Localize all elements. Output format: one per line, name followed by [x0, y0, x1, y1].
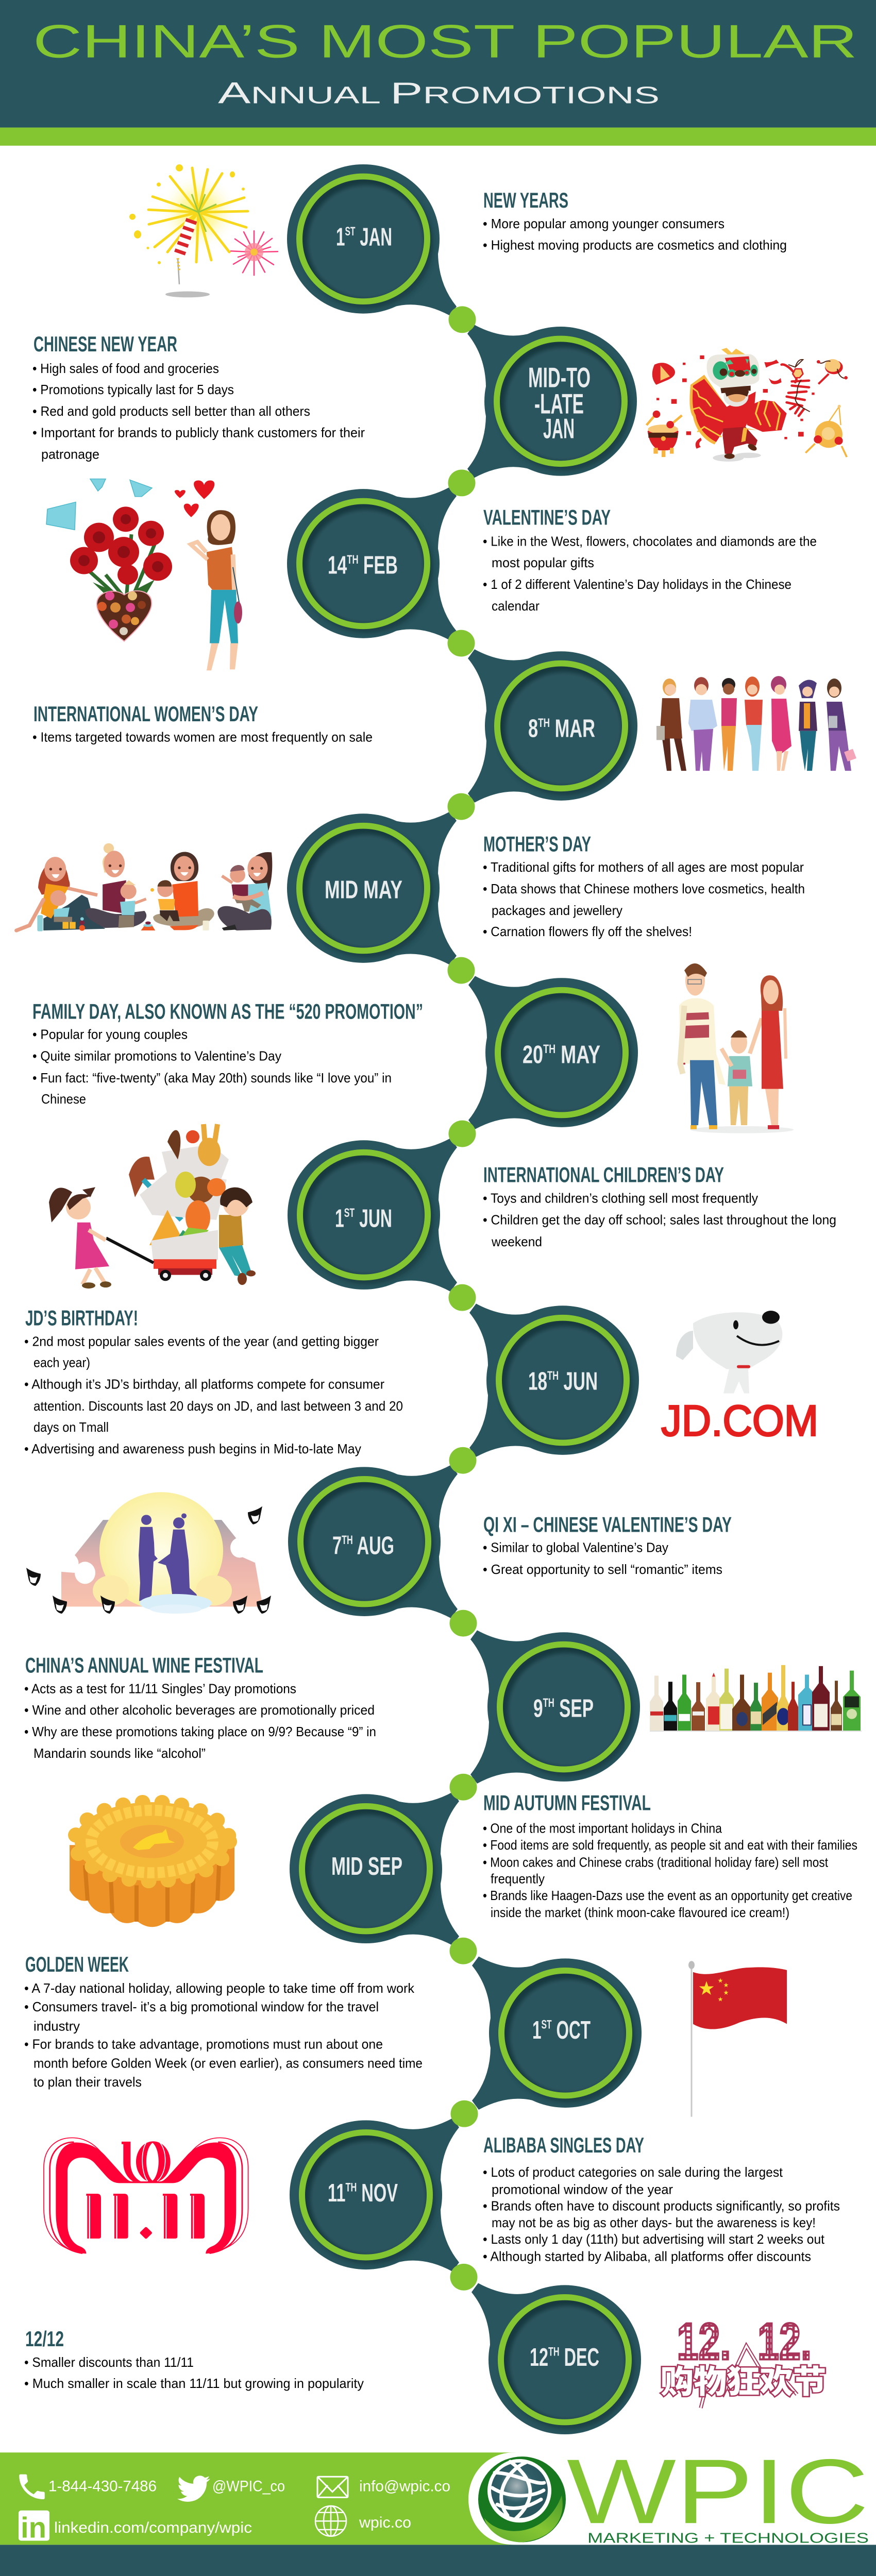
icon: mothers and children	[16, 843, 272, 931]
node: 12th Dec	[488, 2285, 641, 2434]
node: 18th Jun: TH	[547, 1369, 559, 1383]
panel: Valentine's Day	[483, 505, 817, 614]
node: 11th Nov	[290, 2120, 442, 2269]
node: 12th Dec: DEC	[560, 2343, 599, 2371]
bullets: • Important for brands to publicly thank customers for their	[32, 426, 365, 440]
bullets: • Carnation flowers fly off the shelves!	[483, 925, 692, 939]
bullets: weekend	[491, 1235, 542, 1249]
contact: email: info@wpic.co	[359, 2478, 450, 2495]
node: 7th Aug	[288, 1467, 441, 1616]
node: 9th Sep	[487, 1632, 640, 1782]
panel: Family Day	[32, 999, 423, 1107]
node: 12th Dec: TH	[548, 2345, 560, 2359]
icon: globe	[315, 2506, 346, 2536]
icon: mooncake	[70, 1802, 234, 1927]
bullets: • Lots of product categories on sale during the largest	[483, 2165, 783, 2180]
node: 7th Aug: AUG	[353, 1532, 394, 1560]
contact: phone number: 1-844-430-7486	[48, 2478, 157, 2495]
node: 7th Aug: 7	[332, 1532, 347, 1560]
logo: 12.12 shopping carnival: 购物狂欢节	[661, 2364, 826, 2400]
bullets: • Although it’s JD’s birthday, all platforms compete for consumer	[24, 1378, 384, 1392]
logo: WPIC: MARKETING + TECHNOLOGIES	[587, 2530, 869, 2546]
bullets: calendar	[492, 599, 540, 614]
panel: Golden Week	[24, 1952, 423, 2090]
bullets	[24, 1335, 403, 1456]
bullets: • 1 of 2 different Valentine’s Day holidays in the Chinese	[483, 578, 791, 592]
bullets	[24, 2355, 364, 2391]
bullets: • Toys and children’s clothing sell most frequently	[483, 1192, 758, 1206]
bullets: • Highest moving products are cosmetics and clothing	[483, 239, 787, 252]
node: 8th Mar	[485, 651, 637, 801]
bullets: • Traditional gifts for mothers of all ages are most popular	[483, 860, 804, 875]
bullets: promotional window of the year	[492, 2183, 673, 2197]
panel: Alibaba Singles Day	[483, 2133, 840, 2264]
footer	[0, 2441, 876, 2576]
node: 20th May: TH	[543, 1042, 555, 1056]
panel: Mid Autumn Festival	[483, 1791, 857, 1920]
bullets: • Popular for young couples	[32, 1028, 188, 1042]
node: Mid-to-late Jan	[484, 327, 637, 476]
bullets: most popular gifts	[492, 556, 594, 570]
panel: JD's Birthday	[24, 1306, 403, 1456]
bullets: may not be as big as other days- but the awareness is key!	[492, 2216, 816, 2230]
heading: FAMILY DAY, ALSO KNOWN AS THE “520 PROMOTION”	[32, 999, 423, 1024]
bullets	[24, 1981, 423, 2090]
panel: 12/12	[24, 2327, 364, 2391]
node: 11th Nov: 11	[328, 2179, 355, 2207]
bullets: • Quite similar promotions to Valentine’s Day	[32, 1049, 281, 1064]
node: 1st Oct: OCT	[552, 2016, 591, 2044]
icon: kids and toy cart	[49, 1124, 256, 1289]
logo: WPIC	[478, 2441, 869, 2546]
icon: Qi Xi moon and lovers	[26, 1492, 271, 1614]
panel: Qi Xi	[483, 1513, 732, 1577]
icon: group of women	[656, 676, 856, 771]
contact: linkedin: linkedin.com/company/wpic	[54, 2519, 252, 2536]
bullets: inside the market (think moon-cake flavoured ice cream!)	[491, 1906, 789, 1920]
node: 20th May	[485, 978, 638, 1127]
bullets: month before Golden Week (or even earlier), as consumers need time	[33, 2057, 423, 2071]
node: 14th Feb: 14	[328, 551, 357, 579]
icon: phone	[19, 2475, 45, 2499]
node: 9th Sep: TH	[543, 1696, 554, 1710]
bullets	[32, 362, 365, 462]
heading: ALIBABA SINGLES DAY	[483, 2133, 644, 2158]
node: Mid May: MID MAY	[325, 876, 402, 904]
panel: Chinese New Year	[32, 332, 365, 462]
panel: International Women's Day	[32, 702, 373, 744]
node: 8th Mar: TH	[538, 716, 550, 730]
bullets: • For brands to take advantage, promotions must run about one	[24, 2038, 383, 2052]
icon: family	[679, 963, 794, 1133]
bullets: • One of the most important holidays in China	[483, 1822, 722, 1836]
heading: MOTHER’S DAY	[483, 832, 591, 857]
node: 1st Jan: 1	[336, 223, 350, 251]
node: Mid Sep: MID SEP	[331, 1852, 402, 1880]
bullets	[483, 2165, 840, 2264]
bullets: • Although started by Alibaba, all platforms offer discounts	[483, 2250, 811, 2264]
bullets: to plan their travels	[33, 2075, 142, 2090]
icon: valentine roses, chocolates and woman	[46, 479, 242, 670]
bullets	[483, 1192, 836, 1249]
bullets: • Similar to global Valentine’s Day	[483, 1541, 668, 1555]
panel: New Years	[483, 189, 787, 252]
logo: 12.12 shopping carnival: 12.	[757, 2312, 812, 2370]
node: 18th Jun: JUN	[559, 1367, 598, 1396]
icon: China flag	[688, 1961, 787, 2117]
bullets: • Fun fact: “five-twenty” (aka May 20th) sounds like “I love you” in	[32, 1071, 392, 1086]
contact: website: wpic.co	[359, 2514, 411, 2531]
bullets: • Promotions typically last for 5 days	[32, 383, 234, 397]
node: Mid May	[287, 814, 440, 963]
bullets: • Wine and other alcoholic beverages are promotionally priced	[24, 1703, 375, 1718]
bullets: • Consumers travel- it’s a big promotional window for the travel	[24, 2000, 379, 2014]
bullets: packages and jewellery	[492, 904, 622, 918]
bullets	[483, 535, 817, 614]
bullets: • Children get the day off school; sales last throughout the long	[483, 1213, 836, 1228]
bullets: • 2nd most popular sales events of the year (and getting bigger	[24, 1335, 379, 1349]
icon: fireworks	[129, 164, 278, 297]
node: 1st Oct	[489, 1958, 642, 2108]
bullets: • Great opportunity to sell “romantic” items	[483, 1563, 722, 1577]
icon: liquor bottles	[650, 1665, 862, 1732]
bullets: Chinese	[41, 1092, 86, 1107]
header banner	[0, 0, 876, 146]
bullets: frequently	[491, 1872, 545, 1887]
heading: QI XI – CHINESE VALENTINE’S DAY	[483, 1513, 732, 1537]
node: 11th Nov: NOV	[357, 2179, 398, 2207]
bullets: • Like in the West, flowers, chocolates and diamonds are the	[483, 535, 817, 549]
bullets: attention. Discounts last 20 days on JD, and last between 3 and 20	[33, 1399, 403, 1414]
icon: linkedin: in	[21, 2512, 46, 2544]
node: 18th Jun	[486, 1306, 639, 1455]
title: CHINA’S MOST POPULAR	[33, 15, 857, 67]
logo: WPIC: WPIC	[567, 2441, 869, 2543]
panel: China's Annual Wine Festival	[24, 1653, 376, 1761]
logo: 12.12 shopping carnival	[661, 2312, 826, 2408]
bullets: • Advertising and awareness push begins in Mid-to-late May	[24, 1442, 361, 1456]
bullets: • Brands often have to discount products significantly, so profits	[483, 2199, 840, 2214]
logo: JD.com	[661, 1311, 818, 1445]
bullets: • More popular among younger consumers	[483, 217, 725, 231]
bullets: • Why are these promotions taking place on 9/9? Because “9” in	[24, 1725, 376, 1739]
bullets: • Much smaller in scale than 11/11 but growing in popularity	[24, 2377, 364, 2391]
bullets	[483, 860, 805, 939]
node: Mid-to-late Jan: MID-TO	[528, 362, 591, 393]
subtitle: A NNUAL P ROMOTIONS	[218, 76, 660, 110]
logo: 11.11	[44, 2138, 248, 2253]
panel: Mother's Day	[483, 832, 805, 939]
bullets	[483, 1822, 857, 1920]
node: 1st Jun	[288, 1140, 440, 1290]
heading: 12/12	[25, 2327, 64, 2351]
node: 1st Jan	[287, 164, 440, 314]
timeline	[287, 164, 642, 2434]
node: 1st Oct: 1	[532, 2016, 547, 2044]
node: 20th May: 20	[523, 1041, 551, 1069]
heading: GOLDEN WEEK	[25, 1952, 129, 1977]
icon: lion dance	[647, 348, 848, 462]
bullets	[483, 217, 787, 252]
node: 18th Jun: 18	[528, 1367, 557, 1396]
bullets: • Lasts only 1 day (11th) but advertising will start 2 weeks out	[483, 2232, 824, 2247]
bullets	[24, 1682, 376, 1761]
contact: twitter: @WPIC_co	[212, 2478, 285, 2495]
node: Mid Sep	[290, 1794, 442, 1943]
bullets: industry	[33, 2020, 80, 2033]
node: 9th Sep: 9	[533, 1694, 548, 1723]
node: Mid-to-late Jan: JAN	[543, 413, 575, 444]
node: 14th Feb: FEB	[359, 551, 398, 579]
node: Mid-to-late Jan: -LATE	[534, 388, 584, 419]
bullets: • Data shows that Chinese mothers love cosmetics, health	[483, 882, 805, 896]
node: 11th Nov: TH	[345, 2181, 357, 2194]
logo: JD.com: JD.COM	[661, 1397, 818, 1445]
heading: JD’S BIRTHDAY!	[25, 1306, 138, 1330]
node: 8th Mar: MAR	[550, 715, 595, 742]
heading: MID AUTUMN FESTIVAL	[483, 1791, 651, 1816]
heading: VALENTINE’S DAY	[483, 505, 611, 530]
panel: International Children's Day	[483, 1163, 836, 1249]
bullets: • Red and gold products sell better than all others	[32, 404, 310, 419]
bullets: • A 7-day national holiday, allowing people to take time off from work	[24, 1981, 414, 1996]
bullets: days on Tmall	[33, 1420, 109, 1435]
bullets: • Acts as a test for 11/11 Singles’ Day promotions	[24, 1682, 296, 1697]
node: 1st Oct: ST	[542, 2018, 552, 2031]
bullets: • Items targeted towards women are most frequently on sale	[32, 731, 373, 744]
node: 1st Jun: 1	[335, 1205, 349, 1232]
bullets	[483, 1541, 722, 1577]
icon: envelope	[317, 2477, 348, 2497]
bullets: • Moon cakes and Chinese crabs (traditional holiday fare) sell most	[483, 1856, 828, 1870]
node: 9th Sep: SEP	[554, 1694, 594, 1723]
heading: CHINA’S ANNUAL WINE FESTIVAL	[25, 1653, 263, 1677]
node: 1st Jun: JUN	[355, 1205, 392, 1232]
node: 20th May: MAY	[555, 1041, 600, 1069]
bullets: • Smaller discounts than 11/11	[24, 2355, 194, 2370]
node: 1st Jan: JAN	[356, 223, 392, 251]
heading: INTERNATIONAL WOMEN’S DAY	[33, 702, 258, 726]
node: 1st Jan: ST	[345, 225, 356, 239]
node: 14th Feb: TH	[347, 553, 359, 567]
bullets: patronage	[41, 448, 99, 462]
heading: CHINESE NEW YEAR	[33, 332, 177, 357]
bullets: • High sales of food and groceries	[32, 362, 219, 376]
node: 14th Feb	[287, 489, 440, 638]
bullets: Mandarin sounds like “alcohol”	[33, 1747, 206, 1761]
heading: INTERNATIONAL CHILDREN’S DAY	[483, 1163, 724, 1187]
connector dots	[447, 306, 478, 2291]
bullets: each year)	[33, 1356, 90, 1370]
heading: NEW YEARS	[483, 189, 568, 213]
node: 12th Dec: 12	[530, 2343, 559, 2371]
logo: 12.12 shopping carnival: 12.	[677, 2312, 731, 2370]
bullets	[32, 1028, 392, 1107]
node: 1st Jun: ST	[344, 1206, 355, 1220]
icon: twitter	[177, 2476, 210, 2502]
node: 8th Mar: 8	[528, 715, 543, 742]
node: 7th Aug: TH	[342, 1533, 353, 1547]
